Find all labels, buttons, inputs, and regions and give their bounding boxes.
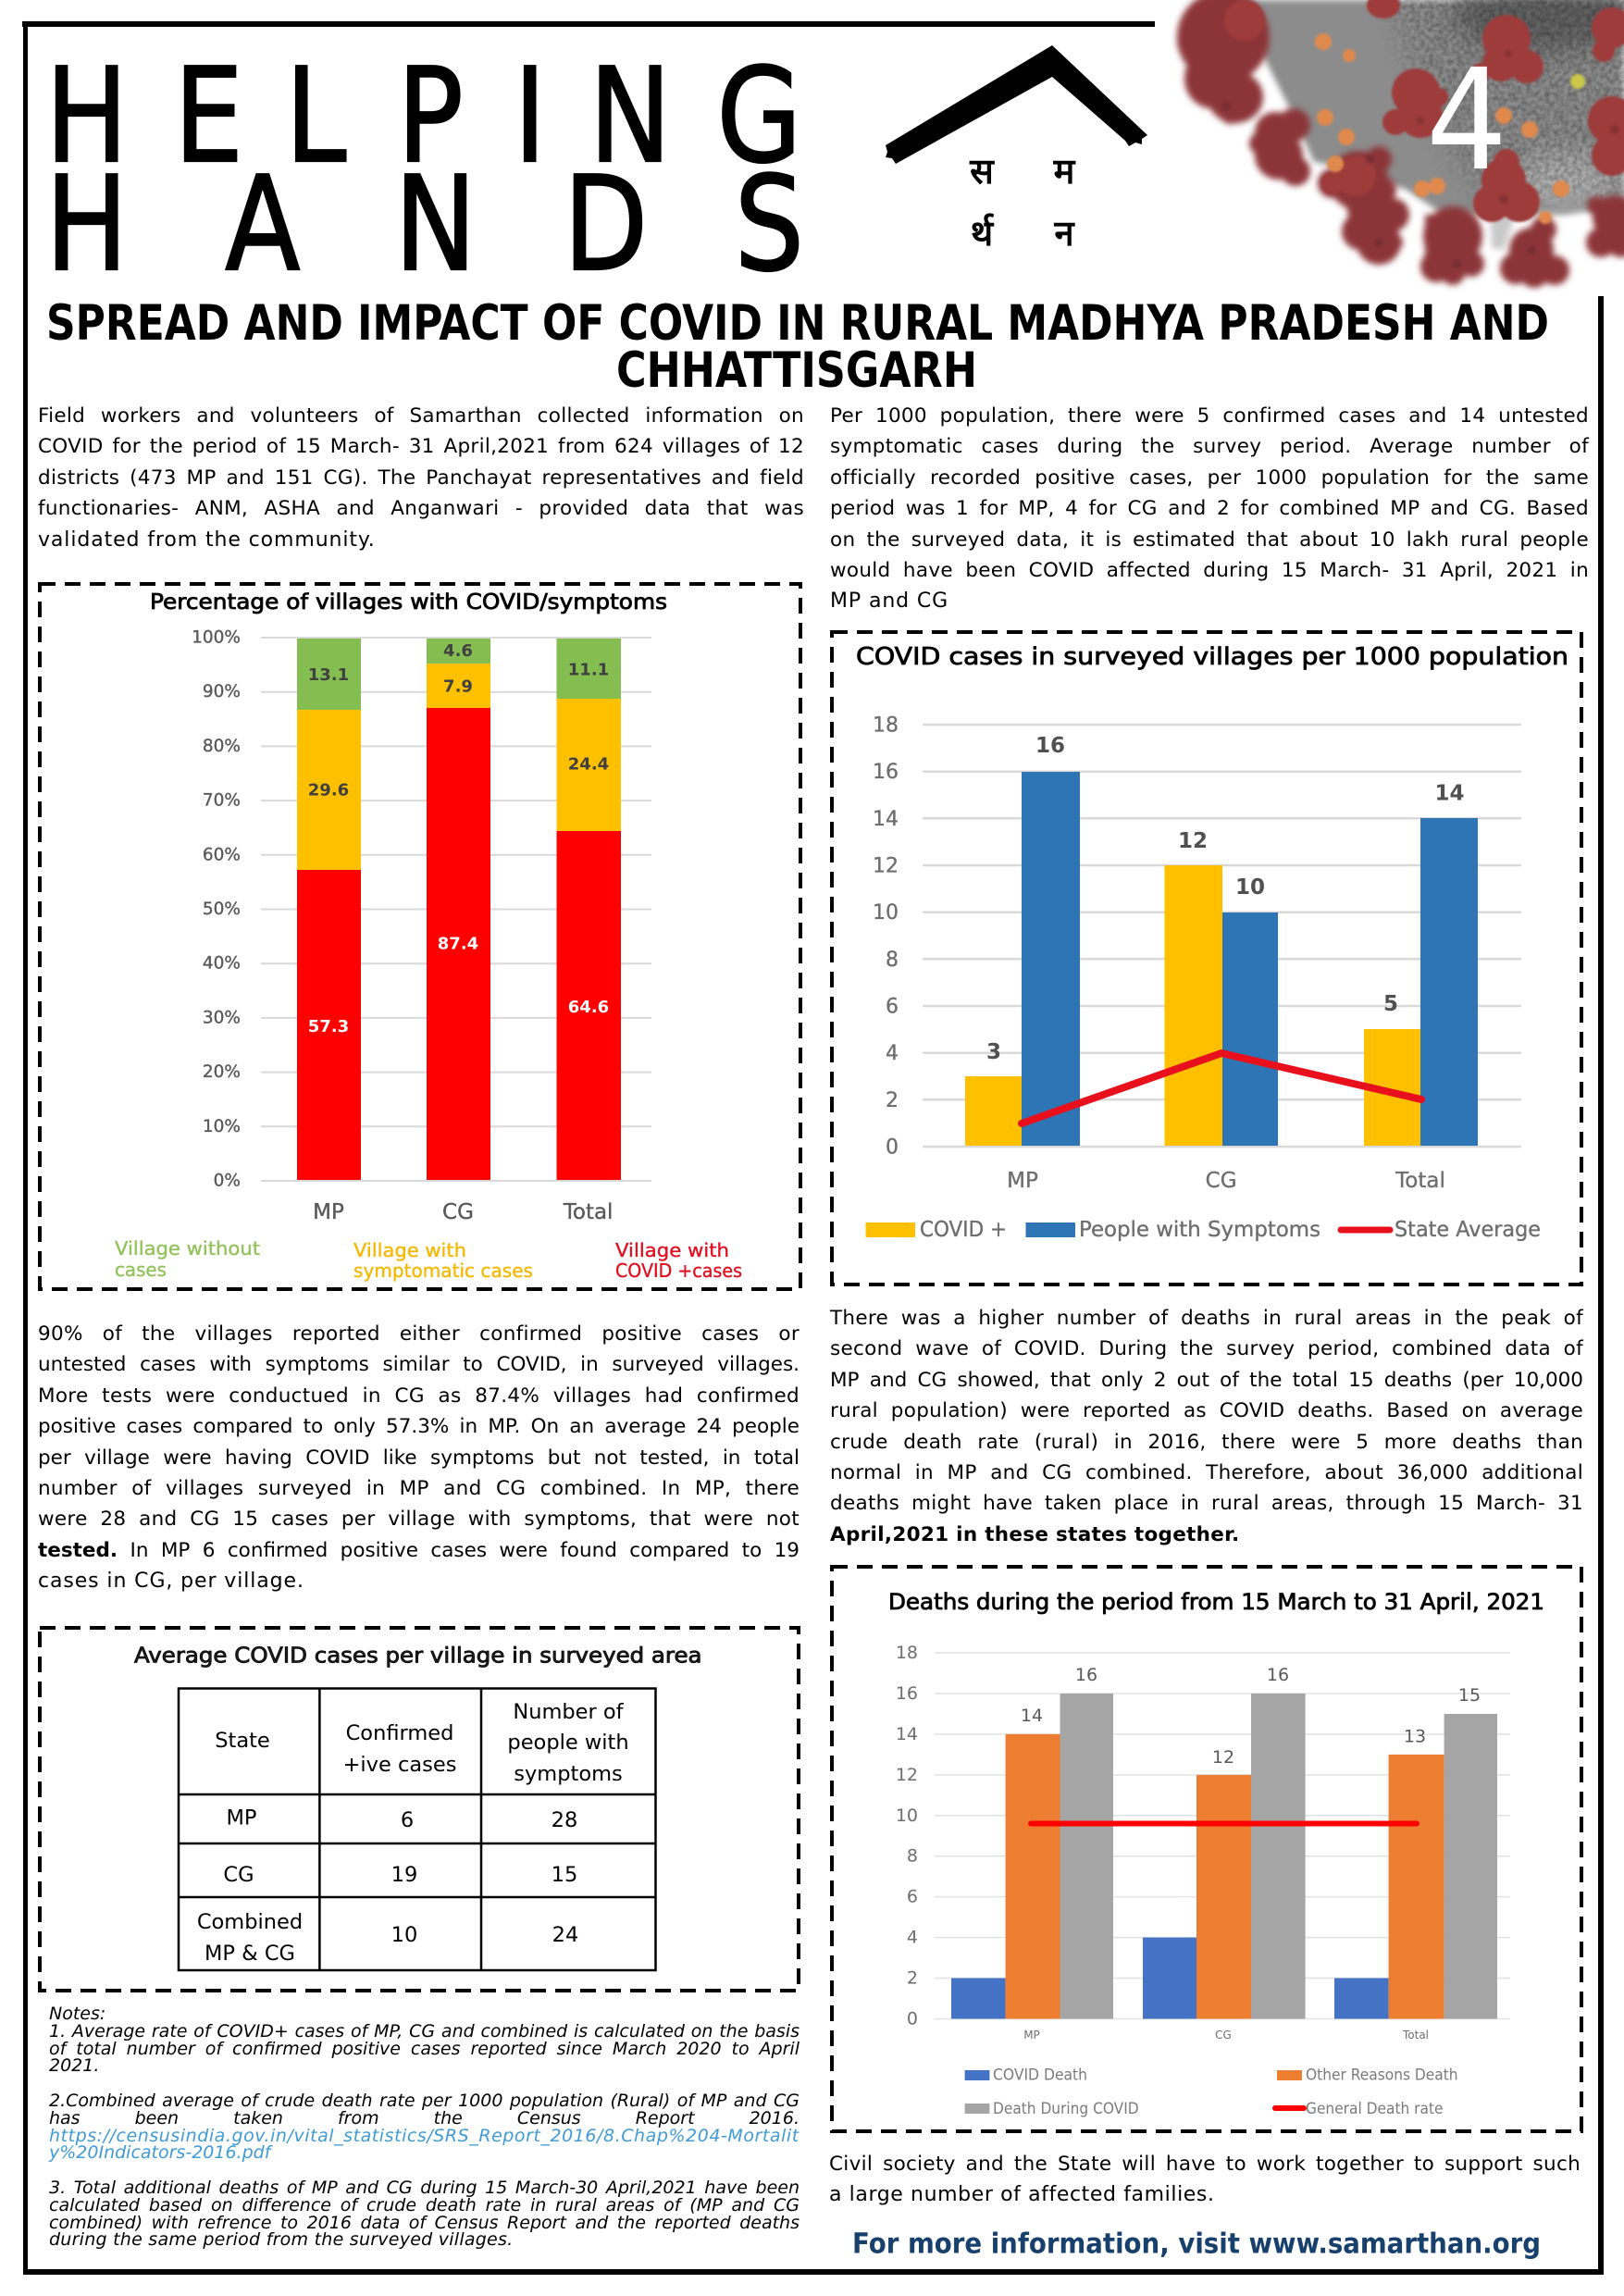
spike clusters, inner <box>1224 0 1624 222</box>
text block: village findings: cases in CG, per village. <box>38 1570 304 1593</box>
text block: survey intro: Field workers and volunteers of Samarthan collected information on <box>38 404 804 428</box>
table title: Average COVID cases per village in surveyed area <box>134 1644 701 1669</box>
y axis labels <box>896 1643 918 2029</box>
category labels: MP <box>313 1200 344 1224</box>
data labels: 16 <box>1035 734 1065 758</box>
legend: General Death rate <box>1306 2100 1444 2118</box>
table text: 6 <box>401 1808 414 1832</box>
text block: closing statement: Civil society and the State will have to work together to support such <box>829 2153 1581 2176</box>
text block: deaths findings: April,2021 in these states together. <box>830 1523 1239 1546</box>
text block: cases per 1000: period was 1 for MP, 4 for CG and 2 for combined MP and CG. Based <box>830 497 1589 520</box>
data labels: 64.6 <box>568 998 609 1017</box>
stacked bars <box>297 639 621 1180</box>
y axis labels: 70% <box>203 791 241 811</box>
illustration: coronavirus <box>1177 0 1624 288</box>
logo letters: न <box>1053 213 1075 254</box>
y axis labels: 60% <box>203 845 241 864</box>
y axis labels: 4 <box>886 1042 899 1065</box>
surface dots <box>1315 33 1569 224</box>
category labels: CG <box>1206 1169 1237 1193</box>
text block: cases per 1000: MP and CG <box>830 590 948 613</box>
legend <box>866 1218 1541 1242</box>
notes: during the same period from the surveyed villages. <box>49 2229 513 2250</box>
text block: village findings: untested cases with symptoms similar to COVID, in surveyed villages. <box>38 1353 800 1376</box>
text block: cases per 1000: officially recorded positive cases, per 1000 population for the same <box>830 466 1589 490</box>
legend: Village without <box>115 1237 260 1260</box>
text block: deaths findings: MP and CG showed, that only 2 out of the total 15 deaths (per 10,000 <box>830 1369 1583 1392</box>
table text: 28 <box>552 1808 577 1832</box>
data labels <box>308 641 609 1036</box>
chart title: COVID cases in surveyed villages per 1000 population <box>856 643 1568 671</box>
notes: Notes: <box>49 2004 105 2024</box>
category labels: MP <box>1007 1169 1038 1193</box>
text block: cases per 1000: Per 1000 population, there were 5 confirmed cases and 14 untested <box>830 404 1589 428</box>
text block: village findings: were 28 and CG 15 cases per village with symptoms, that were not <box>38 1508 800 1531</box>
text block: deaths findings: There was a higher number of deaths in rural areas in the peak of <box>830 1307 1583 1330</box>
notes: 1. Average rate of COVID+ cases of MP, CG and combined is calculated on the basis <box>49 2021 800 2042</box>
data labels: 14 <box>1434 782 1465 806</box>
y axis labels: 6 <box>886 996 899 1018</box>
notes: combined) with refrence to 2016 data of Census Report and the reported deaths <box>49 2213 800 2233</box>
category labels <box>1007 1169 1445 1193</box>
y axis labels: 20% <box>203 1062 241 1082</box>
legend: State Average <box>1395 1218 1541 1242</box>
y axis labels: 4 <box>907 1928 918 1948</box>
text block: village findings: per village were having COVID like symptoms but not tested, in total <box>38 1446 800 1470</box>
y axis labels: 14 <box>896 1724 918 1744</box>
text block: survey intro <box>38 404 804 552</box>
table text: people with <box>507 1731 629 1755</box>
issue number: 4 <box>1426 39 1507 202</box>
y axis labels <box>873 714 899 1159</box>
panel: COVID cases per 1000 population chart <box>832 632 1581 1285</box>
notes: y%20Indicators-2016.pdf <box>49 2142 270 2163</box>
table text: Combined <box>197 1910 303 1934</box>
panel: average cases table <box>40 1628 799 1991</box>
text block: cases per 1000 <box>830 404 1590 613</box>
legend: COVID Death <box>993 2066 1087 2085</box>
data labels: 57.3 <box>308 1017 349 1036</box>
text block: cases per 1000: would have been COVID affected during 15 March- 31 April, 2021 in <box>830 559 1589 582</box>
notes: calculated based on difference of crude death rate in rural areas of (MP and CG <box>49 2195 800 2215</box>
legend <box>115 1237 742 1282</box>
category labels: CG <box>442 1200 474 1224</box>
text block: village findings: positive cases compared to only 57.3% in MP. On an average 24 people <box>38 1415 800 1438</box>
notes: 2021. <box>49 2055 99 2076</box>
text block: survey intro: validated from the community. <box>38 528 376 552</box>
logo letters: र्थ <box>971 213 995 254</box>
notes: has been taken from the Census Report 2016. <box>49 2108 800 2128</box>
logo letters: म <box>1053 151 1076 192</box>
notes: 3. Total additional deaths of MP and CG during 15 March-30 April,2021 have been <box>49 2178 800 2198</box>
data labels: 13 <box>1404 1727 1426 1747</box>
notes <box>48 2004 800 2250</box>
y axis labels: 16 <box>896 1683 918 1704</box>
data labels: 7.9 <box>443 677 473 696</box>
data labels: 10 <box>1235 875 1265 900</box>
logo letters: स <box>969 151 995 192</box>
y axis labels: 8 <box>886 949 899 972</box>
category labels <box>1023 2029 1429 2042</box>
legend: COVID + <box>920 1218 1007 1242</box>
clustered bars <box>951 1694 1497 2019</box>
category labels: Total <box>1395 1169 1445 1193</box>
table text: +ive cases <box>343 1753 456 1777</box>
notes: https://censusindia.gov.in/vital_statistics/SRS_Report_2016/8.Chap%204-Mortalit <box>49 2126 800 2146</box>
legend: Other Reasons Death <box>1306 2066 1458 2085</box>
state average line <box>1022 1053 1421 1123</box>
table text: symptoms <box>514 1762 623 1786</box>
data labels: 87.4 <box>438 935 478 953</box>
category labels: MP <box>1023 2029 1040 2042</box>
y axis labels: 90% <box>203 682 241 701</box>
text block: cases per 1000: symptomatic cases during the survey period. Average number of <box>830 435 1589 458</box>
y axis labels: 10 <box>873 901 899 925</box>
legend: People with Symptoms <box>1079 1218 1320 1242</box>
data labels: 12 <box>1178 829 1208 853</box>
y axis labels: 14 <box>873 808 899 831</box>
text block: village findings: number of villages surveyed in MP and CG combined. In MP, there <box>38 1477 800 1500</box>
main title <box>46 295 1549 399</box>
data labels: 4.6 <box>443 641 473 661</box>
data labels: 16 <box>1075 1665 1097 1685</box>
table text: Confirmed <box>346 1721 453 1745</box>
y axis labels: 6 <box>907 1887 918 1907</box>
legend: Village with <box>615 1239 729 1261</box>
table text: Number of <box>513 1700 625 1724</box>
table text: 24 <box>552 1923 578 1947</box>
data labels: 11.1 <box>568 661 609 679</box>
data labels: 13.1 <box>308 665 349 685</box>
text block: deaths findings: rural population) were reported as COVID deaths. Based on average <box>830 1399 1583 1422</box>
text block: village findings <box>38 1322 800 1593</box>
legend: symptomatic cases <box>353 1260 533 1282</box>
clustered bars <box>965 772 1478 1146</box>
data labels <box>1021 1665 1481 1768</box>
text block: deaths findings: crude death rate (rural) in 2016, there were 5 more deaths than <box>830 1431 1583 1454</box>
y axis labels: 50% <box>203 900 241 919</box>
legend <box>965 2066 1458 2118</box>
table text: State <box>215 1729 270 1753</box>
text block: survey intro: COVID for the period of 15 March- 31 April,2021 from 624 villages of 12 <box>38 435 804 458</box>
data labels: 14 <box>1021 1706 1043 1726</box>
y axis labels: 12 <box>896 1765 918 1785</box>
text block: deaths findings: normal in MP and CG combined. Therefore, about 36,000 additional <box>830 1461 1583 1484</box>
category labels: Total <box>563 1200 613 1224</box>
y axis labels: 18 <box>896 1643 918 1663</box>
text block: deaths findings <box>829 1307 1584 1546</box>
logo: Samarthan <box>886 45 1147 254</box>
panel: percentage of villages chart <box>40 584 800 1289</box>
y axis labels: 10 <box>896 1806 918 1826</box>
data labels: 24.4 <box>568 755 609 774</box>
category labels: Total <box>1402 2029 1429 2042</box>
y axis labels: 2 <box>886 1089 899 1112</box>
masthead: Helping Hands: HANDS <box>45 148 804 301</box>
table text: 15 <box>552 1863 577 1887</box>
text block: cases per 1000: on the surveyed data, it is estimated that about 10 lakh rural people <box>830 528 1589 552</box>
y axis labels: 0 <box>907 2008 918 2029</box>
y axis labels: 40% <box>203 954 241 974</box>
table text: MP & CG <box>205 1942 295 1966</box>
y axis labels: 0 <box>886 1136 899 1159</box>
y axis labels: 0% <box>214 1172 241 1190</box>
table text: 10 <box>391 1923 417 1947</box>
y axis labels: 30% <box>203 1008 241 1027</box>
category labels: CG <box>1215 2029 1232 2042</box>
notes: 2.Combined average of crude death rate per 1000 population (Rural) of MP and CG <box>49 2091 800 2111</box>
text block: survey intro: districts (473 MP and 151 CG). The Panchayat representatives and field <box>38 466 804 490</box>
text block: deaths findings: deaths might have taken place in rural areas, through 15 March- 31 <box>830 1492 1583 1515</box>
y axis labels: 16 <box>873 761 899 784</box>
table text: 19 <box>391 1863 417 1887</box>
text block: village findings: 90% of the villages reported either confirmed positive cases or <box>38 1322 800 1346</box>
y axis labels: 8 <box>907 1846 918 1867</box>
text block: deaths findings: second wave of COVID. During the survey period, combined data of <box>830 1337 1583 1360</box>
legend: COVID +cases <box>615 1260 742 1282</box>
masthead: Helping Hands <box>45 40 804 301</box>
spike clusters, outer <box>1177 0 1624 288</box>
legend: cases <box>115 1259 167 1281</box>
text block: closing statement <box>829 2153 1581 2206</box>
icon: roof <box>886 45 1147 164</box>
footer link: For more information, visit www.samarthan.org <box>852 2228 1541 2260</box>
y axis labels: 100% <box>192 627 241 648</box>
data labels: 15 <box>1458 1685 1481 1706</box>
y axis labels: 80% <box>203 737 241 756</box>
legend: Village with <box>353 1239 466 1261</box>
data labels: 29.6 <box>308 781 349 800</box>
data labels: 3 <box>986 1040 1001 1064</box>
text block: village findings: More tests were conductued in CG as 87.4% villages had confirmed <box>38 1384 800 1408</box>
logo letters <box>969 151 1076 254</box>
notes: of total number of confirmed positive cases reported since March 2020 to April <box>49 2039 800 2059</box>
y axis labels <box>192 627 241 1190</box>
main title: CHHATTISGARH <box>616 342 977 399</box>
data labels: 12 <box>1212 1747 1234 1768</box>
data labels <box>986 734 1465 1064</box>
table text: MP <box>227 1806 256 1831</box>
table text: CG <box>223 1863 254 1887</box>
data labels: 5 <box>1383 992 1398 1016</box>
text block: survey intro: functionaries- ANM, ASHA and Anganwari - provided data that was <box>38 497 804 520</box>
general death rate line <box>1031 1821 1417 1827</box>
chart title: Deaths during the period from 15 March to 31 April, 2021 <box>888 1589 1544 1615</box>
y axis labels: 18 <box>873 714 899 737</box>
y axis labels: 2 <box>907 1967 918 1988</box>
text block: village findings: tested. In MP 6 confirmed positive cases were found compared to 19 <box>38 1539 800 1562</box>
masthead: Helping Hands: HELPING <box>45 40 801 192</box>
spike shading <box>1221 50 1619 268</box>
legend: Death During COVID <box>993 2100 1139 2118</box>
data labels: 16 <box>1267 1665 1289 1685</box>
table grid <box>179 1688 655 1970</box>
panel: deaths chart <box>832 1567 1581 2131</box>
text block: closing statement: a large number of affected families. <box>829 2183 1215 2206</box>
chart title: Percentage of villages with COVID/symptoms <box>150 590 667 614</box>
y axis labels: 12 <box>873 855 899 877</box>
category labels <box>313 1200 613 1224</box>
y axis labels: 10% <box>203 1117 241 1136</box>
table text <box>197 1700 629 1966</box>
